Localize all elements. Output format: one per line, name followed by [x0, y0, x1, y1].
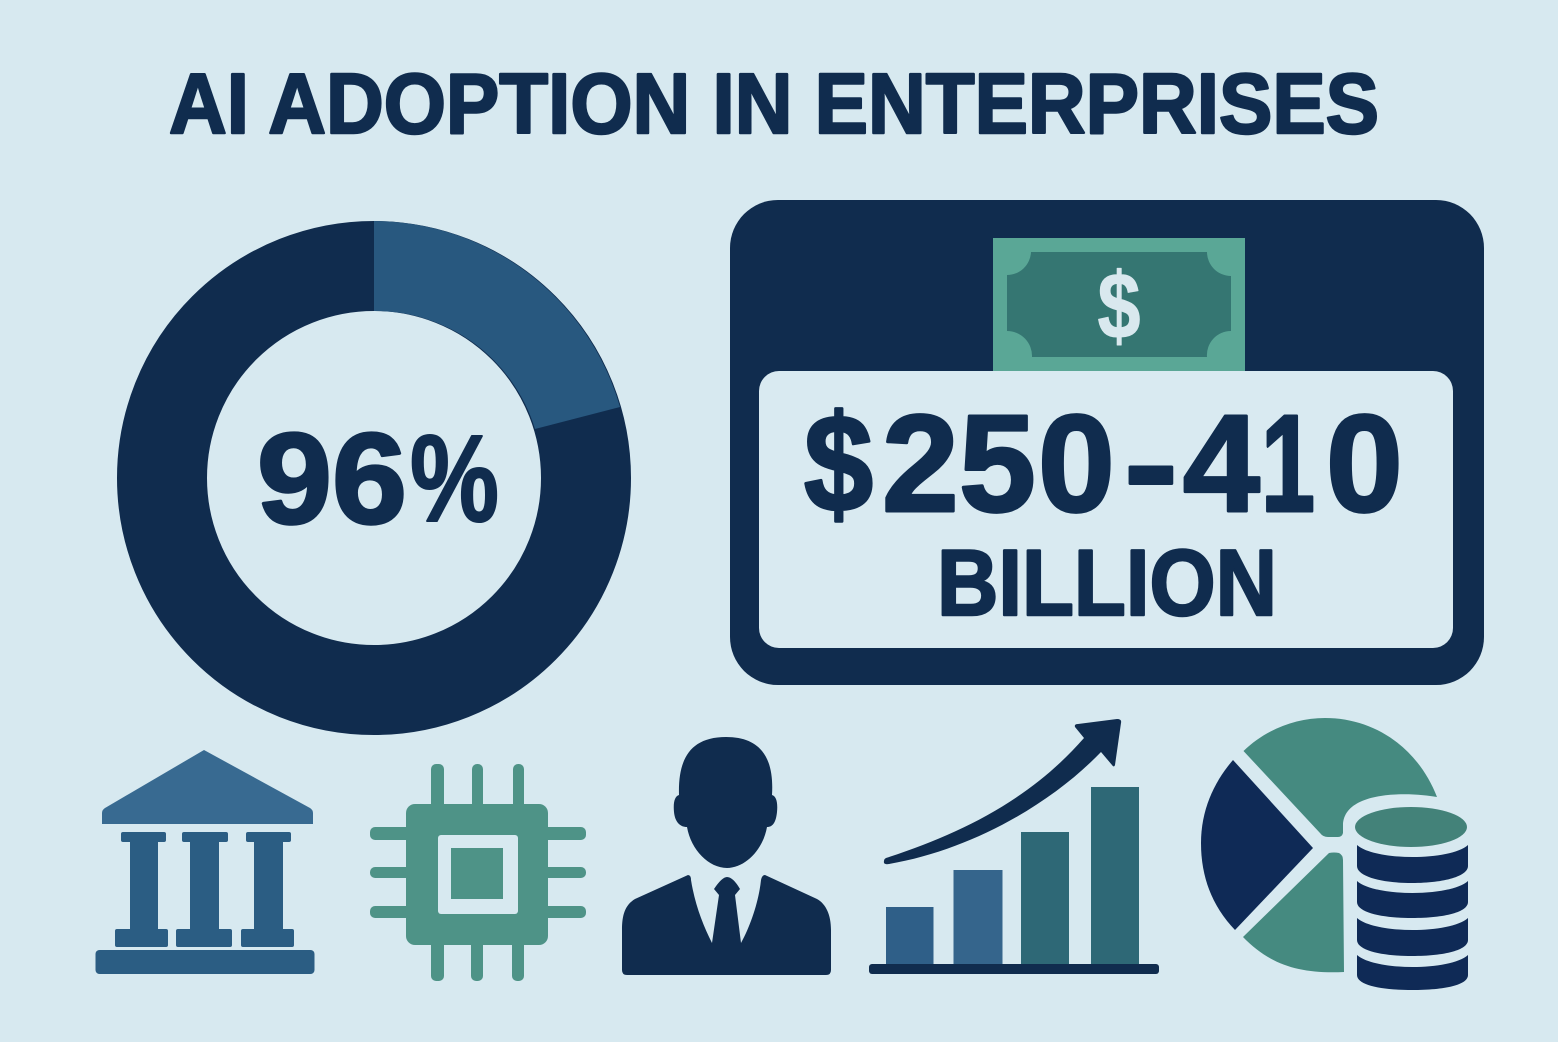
- panel: investment value: [730, 200, 1484, 685]
- donut ring: dark segment: [162, 266, 586, 690]
- icon: banknote: [993, 238, 1245, 371]
- arrow: [884, 719, 1121, 864]
- title: AI ADOPTION IN ENTERPRISES: [169, 57, 1379, 152]
- bars: [886, 787, 1139, 967]
- amount: $: [804, 387, 873, 541]
- icon: business person: [622, 737, 831, 975]
- amount: -: [1124, 387, 1178, 541]
- icon: growth bar chart with arrow: [869, 719, 1159, 974]
- icon: bank building: [96, 750, 314, 974]
- amount: 0: [1326, 387, 1403, 541]
- unit: BILLION: [937, 530, 1277, 635]
- amount: [804, 387, 1403, 541]
- icon: pie chart and database: [1201, 718, 1468, 990]
- icon: microchip: [370, 764, 586, 981]
- amount: 250: [882, 387, 1115, 541]
- database: [1355, 807, 1468, 990]
- icon: banknote: $: [1098, 253, 1140, 358]
- donut value: 96: [257, 407, 407, 551]
- pie slice: dark: [1201, 760, 1313, 930]
- pie slice: top green: [1244, 718, 1437, 837]
- donut value: [257, 407, 499, 551]
- baseline: [869, 964, 1159, 974]
- donut value: %: [410, 411, 499, 548]
- panel inner card: [759, 371, 1453, 648]
- amount: 4: [1183, 387, 1260, 541]
- panel background: [730, 200, 1484, 685]
- pie slice: bottom green: [1243, 852, 1344, 972]
- amount: 1: [1261, 387, 1315, 541]
- donut chart: 96%: [162, 221, 620, 690]
- donut ring: lighter segment: [374, 221, 620, 429]
